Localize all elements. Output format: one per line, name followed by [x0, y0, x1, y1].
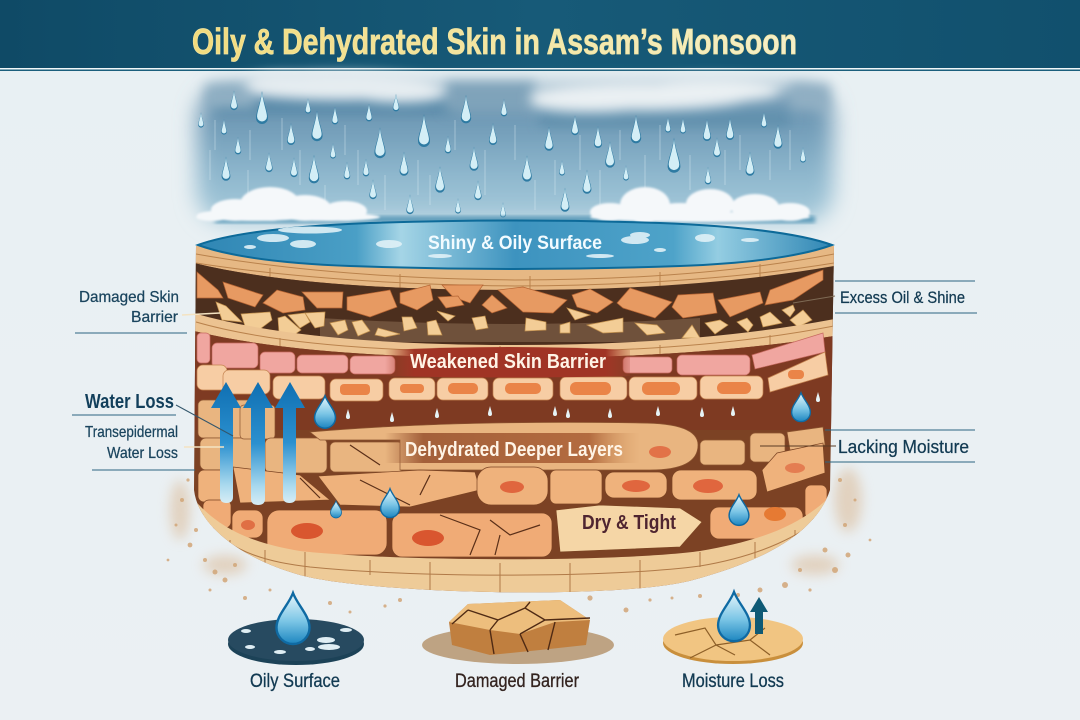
layer: cracked stones — [190, 262, 840, 345]
cloud: upper left — [245, 73, 446, 102]
callout: damaged skin barrier: Barrier — [131, 309, 179, 326]
cloud: lower right — [590, 187, 810, 223]
layer: orange brick row — [197, 352, 828, 401]
dust speckles around the skin block — [167, 468, 871, 614]
layer: lower sand band — [195, 314, 833, 356]
layer: deep stones, middle row — [198, 443, 825, 507]
heading band: dehydrated deeper layers: Dehydrated Deeper Layers — [405, 439, 623, 461]
label: dry and tight: Dry & Tight — [582, 512, 676, 534]
callout: lacking moisture — [760, 430, 975, 462]
cloud: lower left — [196, 187, 380, 221]
water line under clouds — [215, 216, 815, 223]
title: Oily & Dehydrated Skin in Assam’s Monsoon — [192, 21, 797, 62]
layer: base bricks — [198, 500, 826, 592]
layer: pink cell row — [197, 333, 825, 375]
heading: shiny and oily surface: Shiny & Oily Surface — [428, 233, 602, 254]
heading band: weakened skin barrier — [385, 347, 630, 378]
callout: lacking moisture: Lacking Moisture — [838, 437, 969, 457]
header banner — [0, 0, 1080, 71]
cloud: upper right — [530, 78, 780, 112]
callout: damaged skin barrier: Damaged Skin — [79, 289, 179, 306]
callout: damaged skin barrier — [75, 289, 220, 333]
layer: cracks — [300, 445, 540, 555]
layer: red-brown under cells — [190, 330, 840, 430]
label: moisture loss: Moisture Loss — [682, 671, 784, 692]
callout: water loss: Water Loss — [107, 445, 178, 462]
water loss arrows — [211, 382, 305, 505]
label: oily surface: Oily Surface — [250, 671, 340, 692]
layer: upper sand band — [196, 246, 834, 290]
layer: deep stones, lower row — [203, 485, 827, 557]
callout: water loss — [72, 391, 233, 470]
layer: deep dehydrated stones, upper row — [198, 400, 825, 473]
moisture droplets — [315, 392, 820, 525]
heading band: dehydrated deeper layers — [385, 433, 640, 463]
icon: damaged barrier — [422, 600, 614, 664]
callout: excess oil and shine — [793, 281, 977, 313]
raindrops — [198, 90, 806, 218]
storm sky with clouds — [196, 73, 833, 223]
skin cross-section block — [72, 220, 977, 692]
heading band: weakened skin barrier: Weakened Skin Barrier — [410, 351, 606, 373]
shiny oily water surface — [198, 220, 832, 269]
callout: water loss: Transepidermal — [85, 424, 178, 441]
callout: water loss: Water Loss — [85, 391, 174, 413]
callout: excess oil and shine: Excess Oil & Shine — [840, 288, 965, 307]
icon: oily surface — [228, 593, 364, 665]
rain streaks — [210, 118, 790, 215]
icon: moisture loss — [663, 592, 803, 664]
label: damaged barrier: Damaged Barrier — [455, 671, 580, 692]
